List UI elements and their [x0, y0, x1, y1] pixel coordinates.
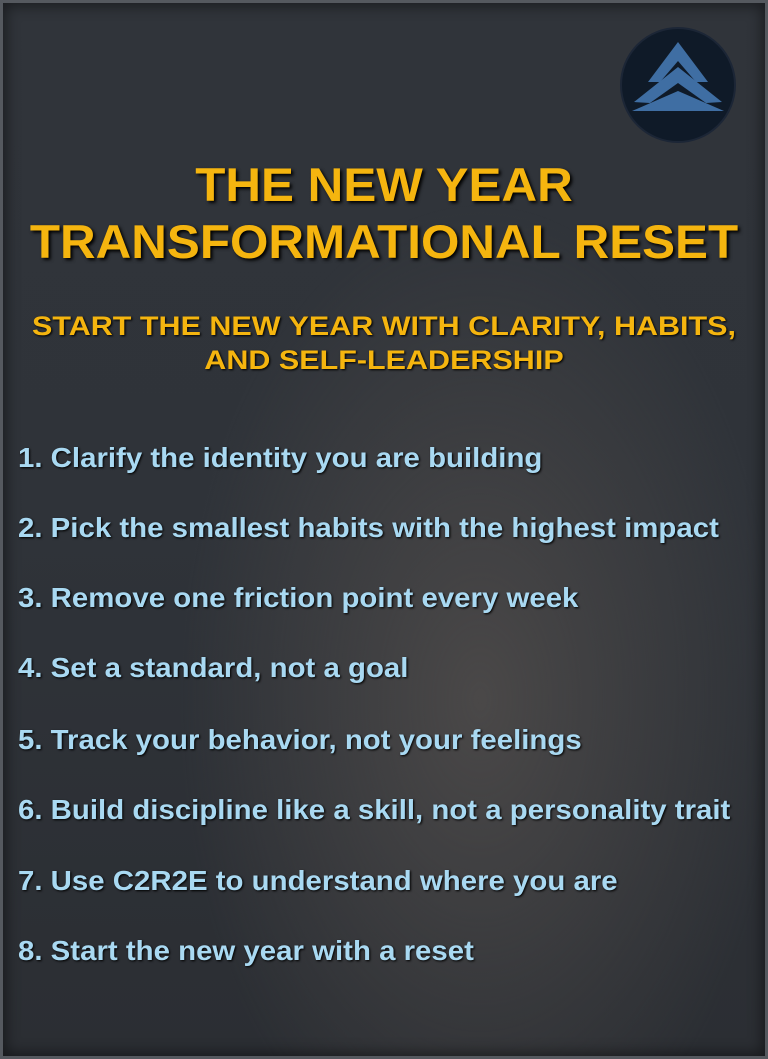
- list item 7: 7. Use C2R2E to understand where you are: [18, 865, 618, 896]
- list item 2: 2. Pick the smallest habits with the highest impact: [18, 512, 719, 543]
- title: THE NEW YEAR: [195, 158, 573, 211]
- list item 1: 1. Clarify the identity you are building: [18, 442, 542, 473]
- subtitle: START THE NEW YEAR WITH CLARITY, HABITS,: [32, 311, 736, 341]
- subtitle: AND SELF-LEADERSHIP: [204, 345, 564, 375]
- list item 4: 4. Set a standard, not a goal: [18, 652, 408, 683]
- icon: logo: [620, 27, 736, 143]
- list item 5: 5. Track your behavior, not your feelings: [18, 724, 582, 755]
- subtitle: [32, 311, 736, 375]
- title: [30, 158, 742, 268]
- list item 3: 3. Remove one friction point every week: [18, 582, 578, 613]
- title: TRANSFORMATIONAL RESET: [30, 215, 738, 268]
- list item 6: 6. Build discipline like a skill, not a personality trait: [18, 794, 730, 825]
- list item 8: 8. Start the new year with a reset: [18, 935, 474, 966]
